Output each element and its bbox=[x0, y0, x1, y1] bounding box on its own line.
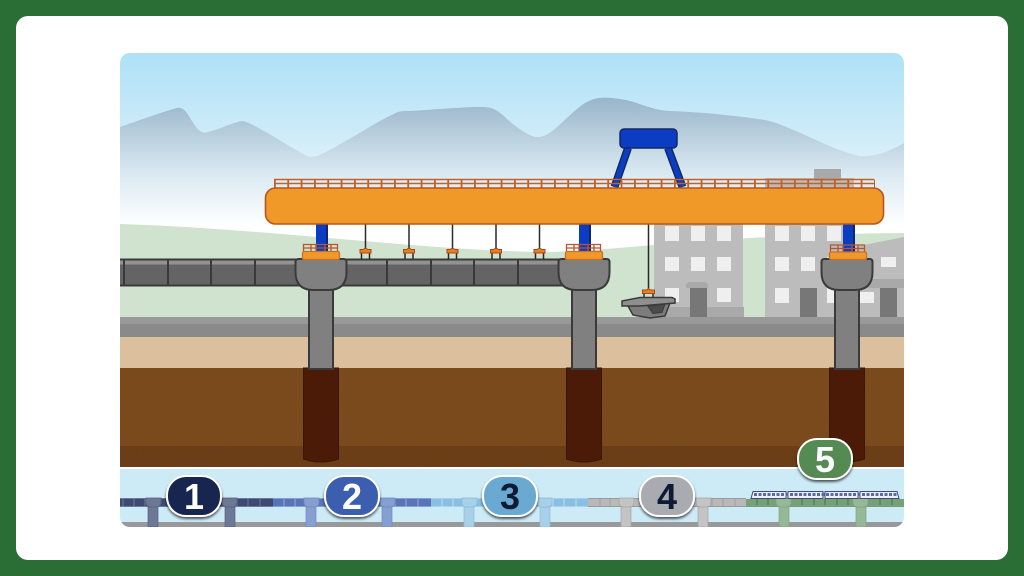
hanging bridge segment bbox=[622, 224, 675, 318]
crane trolley bbox=[614, 129, 682, 187]
mountains bbox=[120, 98, 904, 184]
illustration scene bbox=[119, 53, 904, 527]
green hill bbox=[120, 224, 904, 325]
pile foundation 3 bbox=[830, 368, 864, 462]
badge 5 bbox=[798, 439, 852, 480]
timeline strip bbox=[120, 467, 904, 527]
hanger 1 bbox=[360, 224, 371, 259]
stage 1 miniature viaduct bbox=[120, 498, 273, 527]
pile foundation 2 bbox=[566, 368, 602, 462]
hanger 2 bbox=[404, 224, 414, 259]
stage 2 miniature viaduct bbox=[273, 498, 431, 527]
gantry railing bbox=[274, 180, 875, 184]
pier 1 bbox=[296, 259, 346, 369]
sky bbox=[120, 53, 904, 157]
road bbox=[120, 317, 904, 338]
strip background bbox=[120, 469, 904, 527]
hanger 5 bbox=[534, 224, 545, 259]
badge 1: 1 bbox=[184, 476, 204, 517]
gantry support 1 bbox=[302, 223, 340, 260]
badge 3 bbox=[483, 476, 537, 517]
hanger 3 bbox=[447, 224, 458, 259]
bridge deck bbox=[119, 259, 565, 286]
hanger 4 bbox=[490, 224, 502, 259]
badge 4 bbox=[640, 476, 694, 517]
badge 2 bbox=[325, 476, 379, 517]
gantry support 3 bbox=[830, 223, 866, 260]
pier 2 bbox=[558, 259, 610, 369]
sand layer bbox=[120, 337, 904, 368]
miniature train bbox=[751, 492, 899, 498]
building left bbox=[654, 224, 744, 317]
gantry support 2 bbox=[566, 223, 602, 260]
buildings bbox=[654, 169, 904, 318]
badge 3: 3 bbox=[500, 476, 520, 517]
launching gantry girder bbox=[266, 188, 884, 224]
stage 4 miniature viaduct bbox=[588, 498, 746, 527]
building right bbox=[854, 237, 904, 318]
stage 5 miniature viaduct bbox=[746, 498, 904, 527]
badge 4: 4 bbox=[657, 476, 677, 517]
hanger clamps bbox=[360, 224, 545, 259]
white separator bbox=[120, 467, 904, 469]
building centre bbox=[765, 169, 854, 318]
strip road bbox=[120, 522, 904, 527]
badge 2: 2 bbox=[342, 476, 362, 517]
badge 5: 5 bbox=[815, 439, 835, 480]
badge 1 bbox=[167, 476, 221, 517]
stage 3 miniature viaduct bbox=[431, 498, 588, 527]
pier 3 bbox=[822, 259, 872, 369]
pile foundation 1 bbox=[304, 368, 338, 462]
soil layers bbox=[120, 368, 904, 467]
